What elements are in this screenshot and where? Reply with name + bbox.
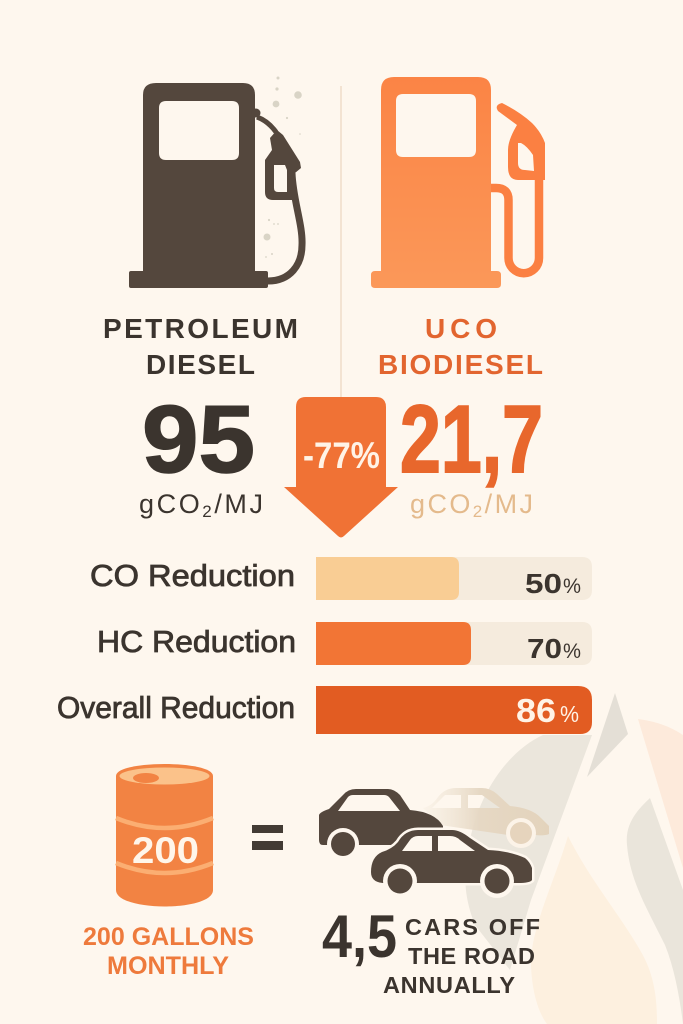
bar row: overall reduction: 86 <box>516 692 556 729</box>
barrel label: 200 <box>132 830 199 871</box>
watermark: flame drop <box>465 693 683 1024</box>
bar row: CO reduction: CO Reduction <box>90 558 295 593</box>
caption: 200 gallons monthly <box>83 923 254 980</box>
soot particles <box>264 76 302 258</box>
caption: 200 gallons monthly: 200 GALLONS <box>83 923 254 951</box>
unit: petroleum diesel: gCO <box>139 489 200 519</box>
icon: faded car <box>423 788 549 848</box>
heading: petroleum diesel: DIESEL <box>146 349 255 380</box>
bar row: overall reduction: Overall Reduction <box>57 690 295 725</box>
caption: cars off the road annually: THE ROAD <box>408 943 535 969</box>
stat: 4,5: 4,5 <box>322 903 397 970</box>
center divider <box>340 86 342 398</box>
value: petroleum diesel 95: 95 <box>142 386 255 493</box>
value: UCO biodiesel 21,7: 21,7 <box>400 386 543 493</box>
icon: UCO biodiesel pump <box>371 77 545 288</box>
caption: cars off the road annually <box>383 914 540 998</box>
unit: UCO biodiesel: /MJ <box>485 489 533 519</box>
arrow label: -77% <box>303 435 380 476</box>
icon: dark car front <box>371 830 532 898</box>
bar row: overall reduction: % <box>560 701 579 727</box>
bar row: HC reduction <box>97 622 592 665</box>
caption: cars off the road annually: CARS OFF <box>405 914 540 940</box>
bar row: CO reduction <box>90 557 592 600</box>
heading: UCO biodiesel: BIODIESEL <box>378 349 543 380</box>
bar row: HC reduction: % <box>563 640 581 663</box>
bar row: HC reduction: HC Reduction <box>97 624 296 659</box>
caption: cars off the road annually: ANNUALLY <box>383 972 515 998</box>
bar row: HC reduction: 70 <box>527 633 562 664</box>
reduction arrow <box>284 397 398 538</box>
unit: UCO biodiesel: 2 <box>473 502 482 521</box>
heading: UCO biodiesel: UCO <box>425 313 497 344</box>
heading: UCO biodiesel <box>378 313 543 380</box>
unit: petroleum diesel: 2 <box>202 502 212 521</box>
bar row: overall reduction <box>57 686 592 734</box>
icon: dark car rear <box>319 789 443 860</box>
bar row: CO reduction: 50 <box>525 568 562 599</box>
unit: UCO biodiesel: gCO <box>410 489 470 519</box>
icon: petroleum diesel pump <box>129 83 302 288</box>
icon: oil barrel <box>116 764 213 906</box>
bar row: CO reduction: % <box>563 575 581 598</box>
unit: petroleum diesel: /MJ <box>214 489 263 519</box>
caption: 200 gallons monthly: MONTHLY <box>107 952 229 980</box>
equals sign <box>252 825 283 850</box>
heading: petroleum diesel: PETROLEUM <box>103 313 298 344</box>
heading: petroleum diesel <box>103 313 298 380</box>
